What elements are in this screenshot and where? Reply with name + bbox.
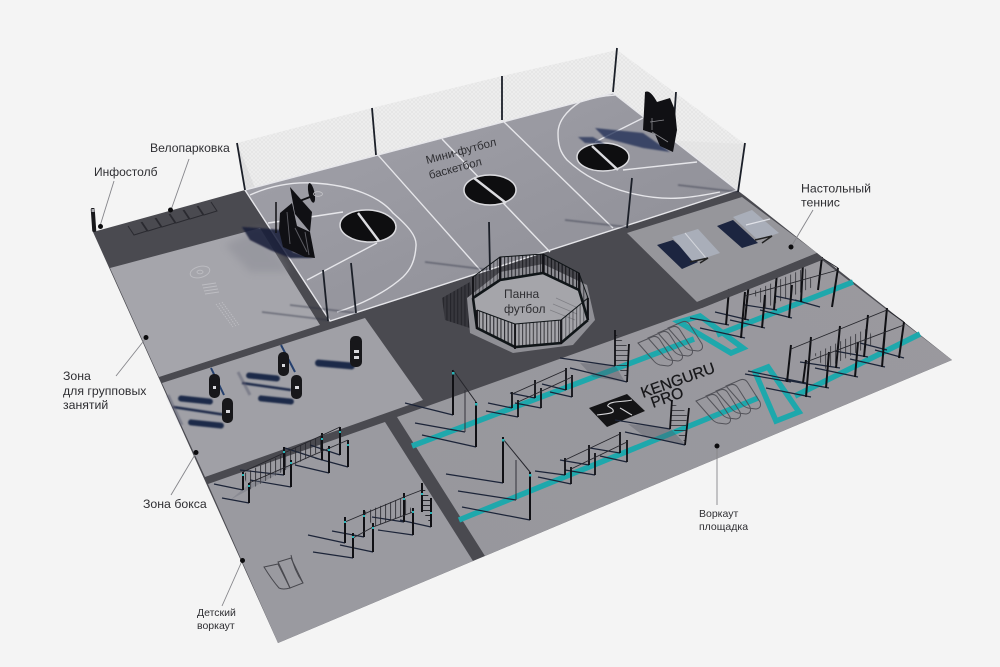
cage label [504,287,546,316]
panel: workout area [397,257,952,556]
table tennis tables [672,210,779,263]
teal track lower [459,334,920,520]
callout: workout area: Воркаут [699,508,738,520]
heading: mini-football basketball: баскетбол [428,156,483,182]
bag shadows [168,359,355,429]
callout: group classes [63,335,148,412]
callout: group classes: Зона [63,369,91,383]
front panels [473,254,588,349]
callout: table tennis [788,182,871,250]
callout: kids workout [197,558,245,632]
cage label: Панна [504,287,540,301]
workout: wall ladder upper [560,330,629,382]
icon: bicycle parking [128,202,217,235]
court lines [245,93,737,321]
callout: kids workout: воркаут [197,620,235,632]
workout: pull-up set lower left [446,437,532,520]
fence mesh around the court [237,50,745,230]
icon: info pole [91,208,96,232]
icon: basketball hoop right [643,91,677,152]
strip between tennis and workout [697,253,824,308]
workout set upper [214,427,349,503]
workout: seat frame lower [696,379,760,424]
callout: info pole [94,165,158,229]
teal track upper [412,282,853,446]
icon: basketball hoop left [276,182,322,258]
court circle right [577,143,629,171]
workout: wall ladder lower [615,400,689,445]
workout: parallel bars lower [535,432,627,484]
panel: kids workout zone [208,422,473,643]
panel: panna football cage [442,254,595,353]
workout: monkey bars top right [690,257,838,338]
callout: group classes: занятий [63,398,108,412]
workout: monkey bars bottom right [745,308,904,397]
panel: boxing zone [162,318,423,477]
logo: Kenguru Pro: KENGURU [639,360,717,402]
punching bags [209,336,362,423]
table shadows [657,220,758,269]
callout: info pole: Инфостолб [94,165,158,179]
panel: mini-football / basketball court [245,93,737,321]
heading: mini-football basketball: Мини-футбол [425,137,498,167]
court circle left [339,209,397,243]
callout: bike parking [150,141,230,212]
kids climbing frame [264,555,303,589]
ground base (dark asphalt) [93,93,952,643]
panel: group classes zone [110,228,320,377]
workout: seat frame upper [638,321,702,366]
heading: mini-football basketball [425,137,498,182]
callout: boxing zone [143,450,207,511]
court circle centre [464,175,516,205]
cage floor [473,273,588,347]
callout: kids workout: Детский [197,607,236,619]
workout: pull-up set upper left [405,370,478,447]
fence posts [237,48,745,321]
panel: table tennis zone [627,197,817,302]
back panels [473,254,588,320]
cage label: футбол [504,302,546,316]
floor markings [189,264,239,327]
callout: table tennis: теннис [801,196,840,210]
callout: bike parking: Велопарковка [150,141,230,155]
callout: group classes: для групповых [63,384,147,398]
callout: table tennis: Настольный [801,182,871,196]
workout: parallel bars upper [486,368,572,417]
court shadows and posts [237,48,745,321]
callout: workout area: площадка [699,521,748,533]
workout set lower [308,483,432,558]
callout: boxing zone: Зона бокса [143,497,207,511]
callout: workout area [699,444,748,533]
logo: Kenguru Pro: PRO [649,385,686,412]
logo: Kenguru Pro [589,360,717,427]
